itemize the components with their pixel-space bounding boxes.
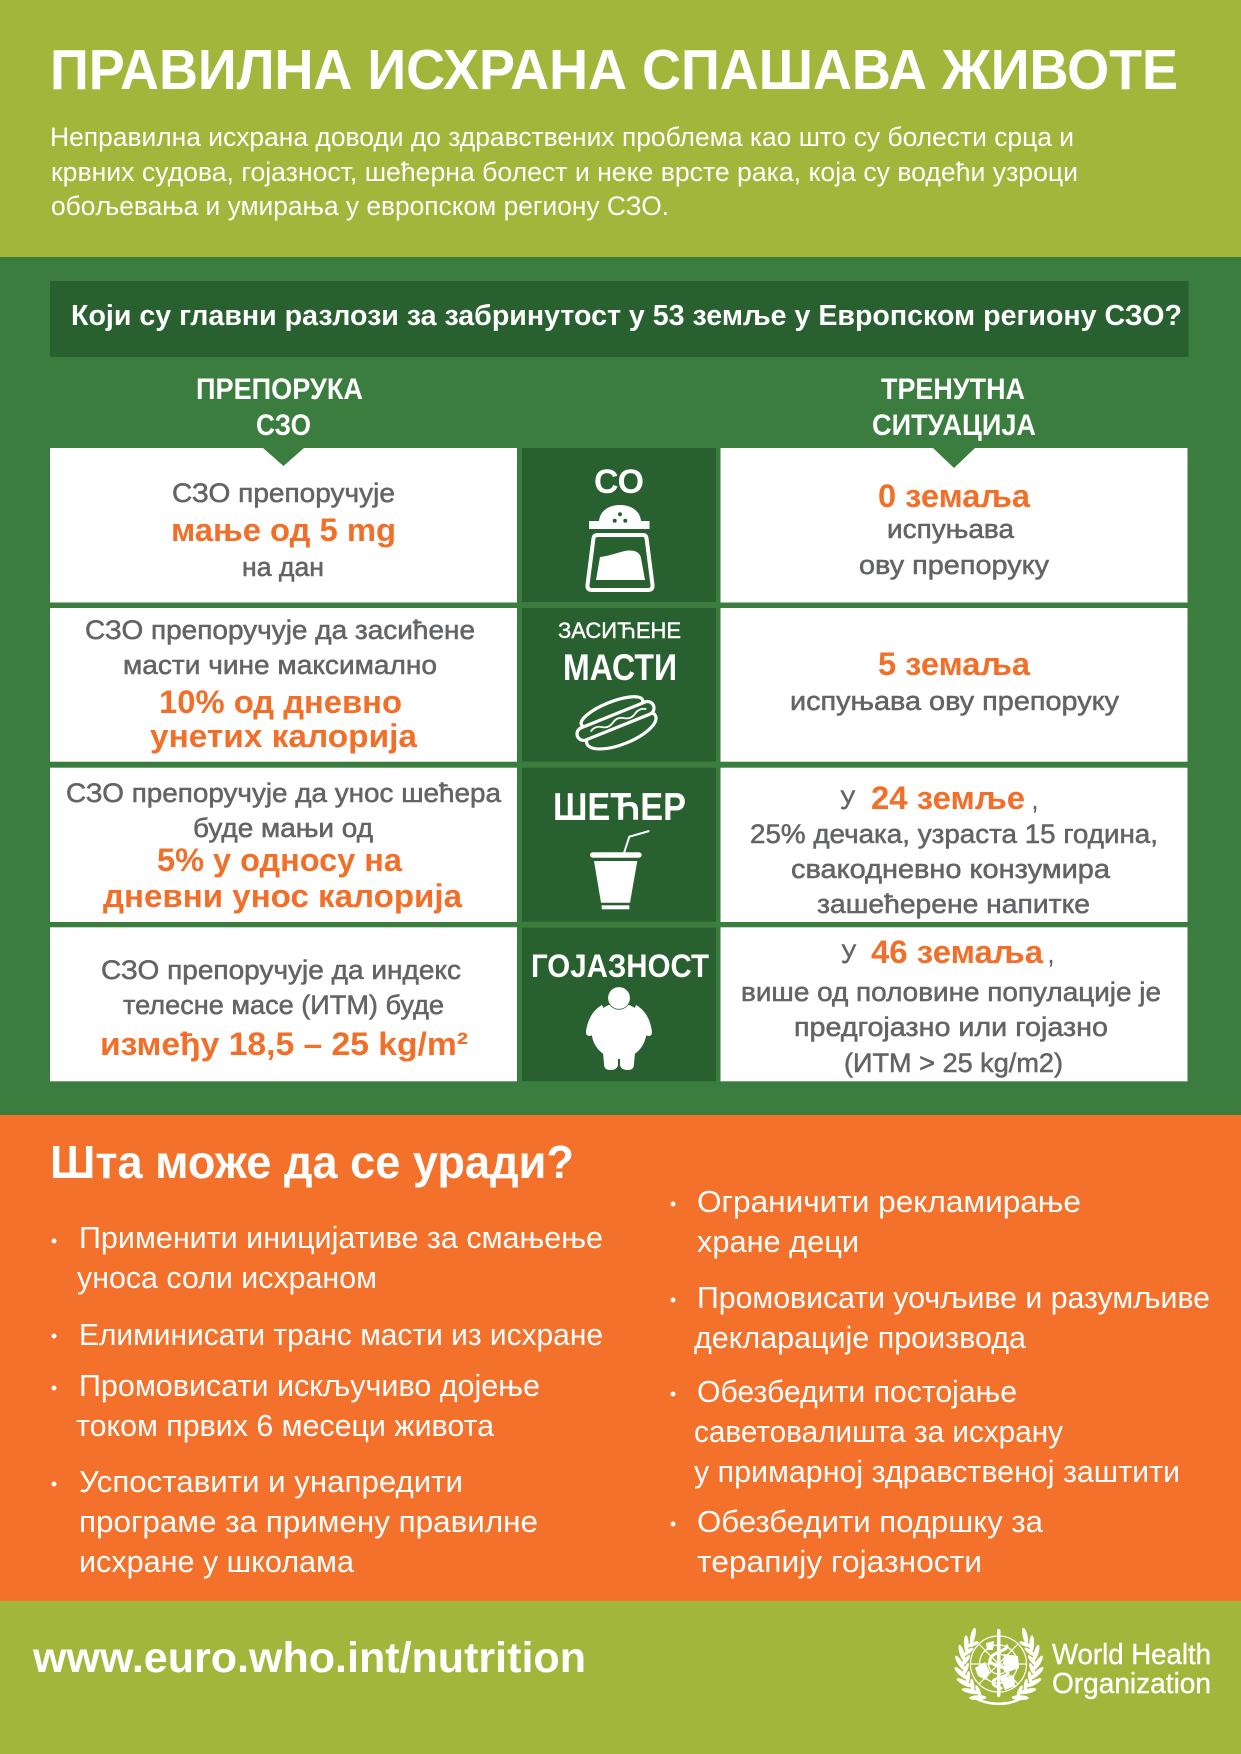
left action list: Применити иницијативе за смањење [79,1220,603,1255]
sugar recommendation cell: СЗО препоручује да унос шећера [66,778,502,808]
fats category cell: ЗАСИЋЕНЕ [558,618,681,643]
question banner: Који су главни разлози за забринутост у 53 земље у Европском региону СЗО? [71,300,1182,332]
fats situation cell: испуњава ову препоруку [790,686,1120,716]
salt category cell: СО [594,463,644,501]
intro text [50,122,1078,221]
right action list [670,1184,1210,1579]
salt situation cell [720,448,1188,602]
sugar situation cell: зашећерене напитке [817,889,1090,919]
sugar recommendation cell [50,768,517,922]
fats recommendation cell: унетих калорија [150,718,417,754]
sugar recommendation cell: 5% у односу на [157,842,402,878]
sugar recommendation cell: дневни унос калорија [103,878,462,914]
column heading: recommendation [196,373,363,442]
right action list: Обезбедити постојање [697,1374,1017,1409]
panel: footer [0,1601,1241,1754]
left action list: Промовисати искључиво дојење [79,1368,540,1403]
section heading: Шта може да се уради? [50,1136,574,1188]
right action list: Обезбедити подршку за [697,1504,1044,1539]
left action list: програме за примену правилне [79,1504,538,1539]
fats category cell: МАСТИ [563,647,677,688]
question banner [50,281,1188,357]
intro text: Неправилна исхрана доводи до здравствених проблема као што су болести срца и [50,122,1074,152]
fats recommendation cell: масти чине максимално [123,650,437,680]
sugar situation cell: У [840,785,856,815]
salt recommendation cell: на дан [242,552,324,582]
obesity category cell: ГОЈАЗНОСТ [531,948,709,984]
column heading: current situation: СИТУАЦИЈА [872,409,1036,442]
column heading: recommendation: СЗО [256,409,311,442]
obesity recommendation cell [50,927,517,1081]
right action list: хране деци [697,1224,859,1259]
sugar situation cell: свакодневно конзумира [791,854,1111,884]
panel: what can be done [0,1115,1241,1601]
fats situation cell: 5 земаља [878,646,1030,682]
fats category cell [522,608,716,762]
right action list: декларације производа [694,1320,1027,1355]
sugar situation cell: 25% дечака, узраста 15 година, [750,819,1158,849]
organization name [1052,1639,1211,1700]
title: ПРАВИЛНА ИСХРАНА СПАШАВА ЖИВОТЕ [50,38,1178,102]
right action list: саветовалишта за исхрану [694,1414,1063,1449]
icon: hot dog [570,688,663,759]
left action list: Елиминисати транс масти из исхране [79,1317,603,1352]
right action list: терапију гојазности [697,1544,982,1579]
icon: obese person [586,987,652,1070]
left action list: током првих 6 месеци живота [76,1408,495,1443]
panel: header band [0,0,1241,257]
obesity situation cell: У [841,939,857,969]
emblem [953,1627,1045,1704]
salt situation cell: 0 земаља [878,478,1030,514]
obesity recommendation cell: телесне масе (ИТМ) буде [123,990,444,1020]
column heading: current situation [872,373,1036,442]
salt recommendation cell: мање од 5 mg [171,512,396,548]
sugar situation cell: 24 земље [871,780,1025,816]
left action list: исхране у школама [79,1544,355,1579]
column heading: current situation: ТРЕНУТНА [881,373,1025,406]
right action list: Ограничити рекламирање [697,1184,1081,1219]
sugar recommendation cell: буде мањи од [193,813,373,843]
left action list: Успоставити и унапредити [79,1464,463,1499]
organization name: World Health [1052,1639,1211,1671]
salt recommendation cell: СЗО препоручује [172,478,395,508]
row: obesity [50,927,1188,1081]
fats recommendation cell [50,608,517,762]
row: salt [50,448,1188,602]
obesity situation cell: више од половине популације је [741,977,1161,1007]
icon: salt shaker [587,505,653,590]
obesity recommendation cell: између 18,5 – 25 kg/m² [100,1026,468,1062]
right action list: у примарној здравственој заштити [694,1454,1180,1489]
sugar situation cell [720,768,1188,922]
row: sugar [50,768,1188,922]
obesity category cell [522,928,716,1081]
fats recommendation cell: 10% од дневно [159,684,402,720]
salt situation cell: ову препоруку [859,550,1050,580]
obesity situation cell: предгојазно или гојазно [794,1012,1108,1042]
salt situation cell: испуњава [887,514,1015,544]
salt category cell [522,448,716,602]
fats situation cell [720,608,1188,762]
obesity situation cell: 46 земаља [871,934,1043,970]
left action list: уноса соли исхраном [77,1260,377,1295]
intro text: обољевања и умирања у европском региону СЗО. [51,191,669,221]
right action list: Промовисати уочљиве и разумљиве [697,1280,1210,1315]
intro text: крвних судова, гојазност, шећерна болест и неке врсте рака, која су водећи узроци [51,157,1078,187]
panel: comparison table [0,257,1241,1115]
salt recommendation cell [50,448,517,602]
organization name: Organization [1052,1668,1211,1700]
icon: drink cup [590,831,649,909]
obesity situation cell: , [1048,939,1054,969]
row: saturated fats [50,608,1188,762]
column heading: recommendation: ПРЕПОРУКА [196,373,363,406]
fats recommendation cell: СЗО препоручује да засићене [85,615,475,645]
logo: World Health Organization [953,1627,1211,1704]
sugar category cell [522,768,716,922]
obesity situation cell: (ИТМ > 25 kg/m2) [844,1048,1063,1078]
sugar situation cell: , [1032,785,1038,815]
left action list [52,1220,603,1579]
website url: www.euro.who.int/nutrition [32,1634,586,1682]
obesity recommendation cell: СЗО препоручује да индекс [101,955,461,985]
sugar category cell: ШЕЋЕР [553,786,686,829]
obesity situation cell [720,927,1188,1081]
